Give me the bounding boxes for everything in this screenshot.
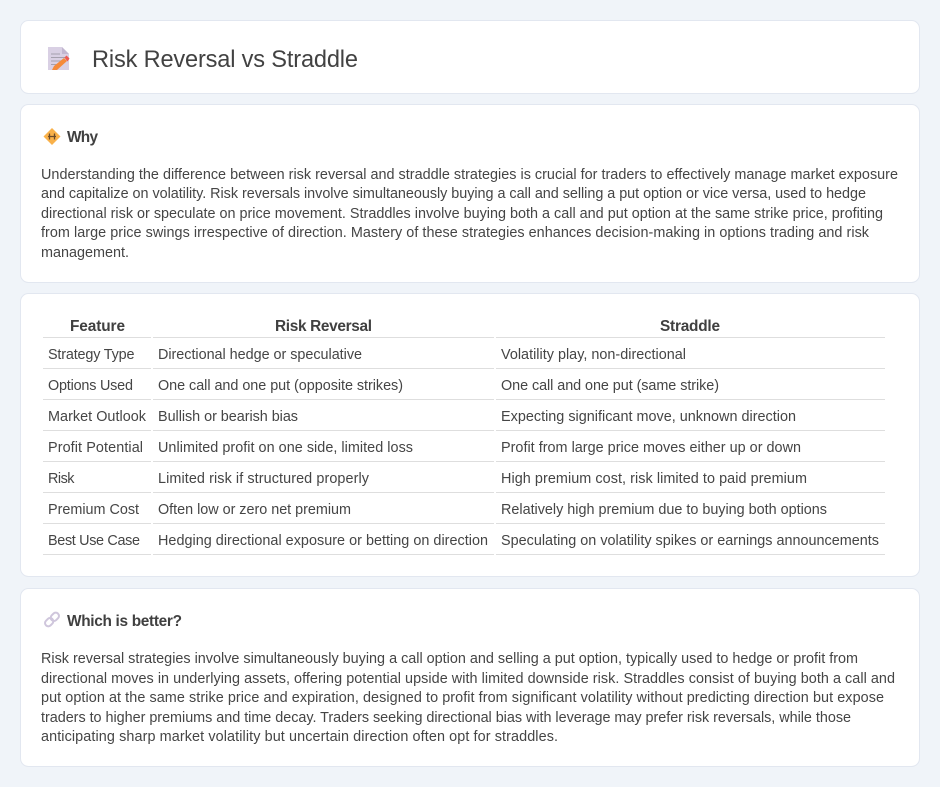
- why paragraph: directional risk or speculate on price movement. Straddles involve buying both a call and put option at the same strike price, profiting: [41, 206, 883, 222]
- row: strategy type: Directional hedge or speculative: [158, 347, 362, 363]
- panel: why: [20, 104, 920, 282]
- row: strategy type: [48, 347, 686, 363]
- row: profit potential: [48, 440, 801, 456]
- row: market outlook: Expecting significant move, unknown direction: [501, 409, 796, 425]
- which is better paragraph: put option at the same strike price and expiration, designed to profit from significant volatility without predicting direction but expose: [41, 690, 884, 706]
- icon: memo with pencil: [48, 47, 70, 70]
- table header: Straddle: [660, 318, 720, 335]
- why paragraph: [41, 167, 898, 261]
- row: best use case: Best Use Case: [48, 533, 140, 549]
- row: profit potential: Profit from large price moves either up or down: [501, 440, 801, 456]
- row: options used: Options Used: [48, 378, 133, 394]
- row: risk: Limited risk if structured properly: [158, 471, 370, 487]
- which is better paragraph: traders to higher premiums and time decay. Traders seeking directional bias with leverage may prefer risk reversals, while those: [41, 710, 851, 726]
- why paragraph: and capitalize on volatility. Risk reversals involve simultaneously buying a call and selling a put option or vice versa, used to hedge: [41, 186, 866, 202]
- row: risk: [48, 471, 807, 487]
- panel: which is better: [20, 588, 920, 766]
- which is better paragraph: Risk reversal strategies involve simultaneously buying a call option and selling a put option, typically used to hedge or profit from: [41, 651, 858, 667]
- panel: comparison table: [20, 294, 920, 576]
- row: market outlook: Bullish or bearish bias: [158, 409, 298, 425]
- row: best use case: Speculating on volatility spikes or earnings announcements: [501, 533, 879, 549]
- table header: [70, 318, 720, 335]
- table header: Risk Reversal: [275, 318, 372, 335]
- row: premium cost: Premium Cost: [48, 502, 139, 518]
- which is better paragraph: anticipating sharp market volatility but uncertain direction often opt for straddles.: [41, 729, 558, 745]
- icon: link: [44, 611, 60, 628]
- row: options used: [48, 378, 719, 394]
- why paragraph: Understanding the difference between risk reversal and straddle strategies is crucial for traders to effectively manage market exposure: [41, 167, 898, 183]
- row: best use case: Hedging directional exposure or betting on direction: [158, 533, 488, 549]
- table header: Feature: [70, 318, 125, 335]
- row: best use case: [48, 533, 879, 549]
- row: options used: One call and one put (opposite strikes): [158, 378, 403, 394]
- row: premium cost: Often low or zero net premium: [158, 502, 351, 518]
- row: profit potential: Unlimited profit on one side, limited loss: [158, 440, 413, 456]
- row: profit potential: Profit Potential: [48, 440, 143, 456]
- row: risk: High premium cost, risk limited to paid premium: [501, 471, 807, 487]
- row: options used: One call and one put (same strike): [501, 378, 719, 394]
- title: Risk Reversal vs Straddle: [92, 47, 358, 73]
- why paragraph: from large price swings irrespective of direction. Mastery of these strategies enhances decision-making in options trading and risk: [41, 225, 870, 241]
- row: strategy type: Strategy Type: [48, 347, 134, 363]
- row: market outlook: Market Outlook: [48, 409, 147, 425]
- row: premium cost: Relatively high premium due to buying both options: [501, 502, 827, 518]
- which is better paragraph: [41, 651, 895, 745]
- row: risk: Risk: [48, 471, 75, 487]
- row: strategy type: Volatility play, non-directional: [501, 347, 686, 363]
- icon: warning diamond: [44, 128, 60, 145]
- row: premium cost: [48, 502, 827, 518]
- panel: title header: [20, 20, 920, 94]
- heading: why: Why: [67, 129, 98, 146]
- heading: which is better: Which is better?: [67, 613, 182, 630]
- row: market outlook: [48, 409, 796, 425]
- why paragraph: management.: [41, 245, 129, 261]
- which is better paragraph: directional moves in underlying assets, offering potential upside with limited downside risk. Straddles consist of buying both a call and: [41, 671, 895, 687]
